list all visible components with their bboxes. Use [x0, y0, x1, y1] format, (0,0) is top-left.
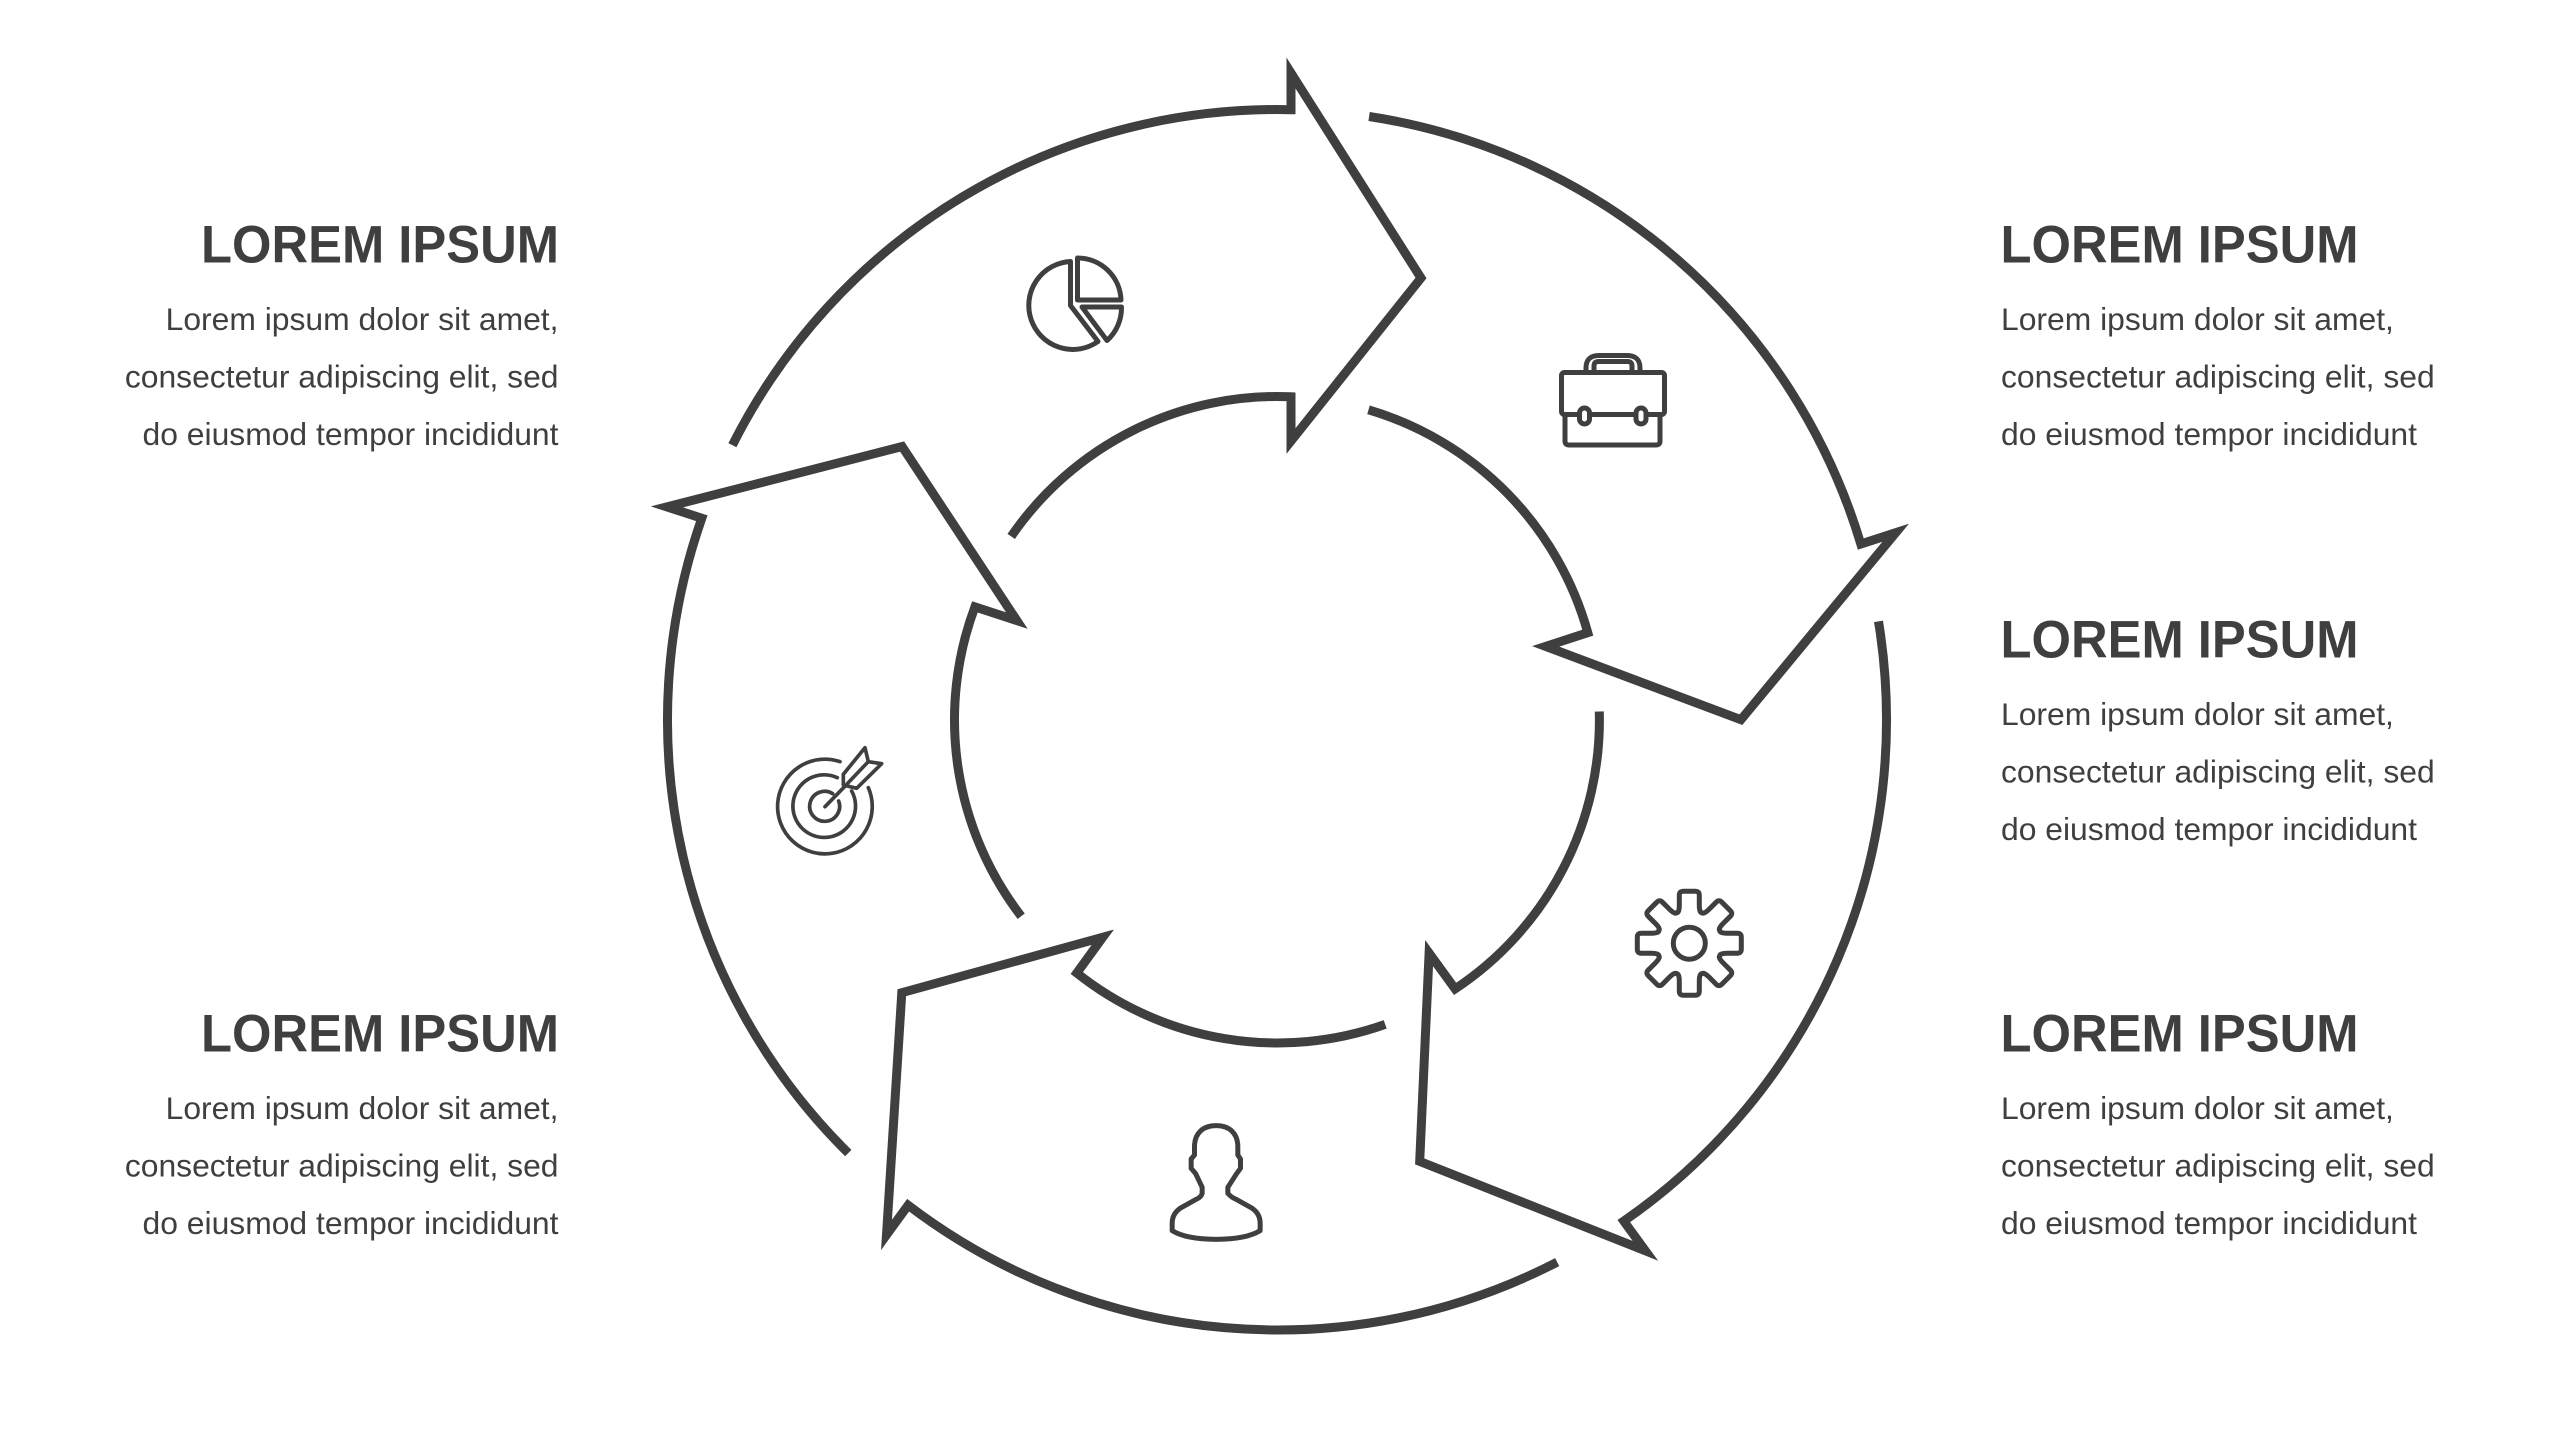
text block: bottom right — [2000, 1004, 2435, 1241]
text block: top right: Lorem ipsum dolor sit amet, — [2001, 301, 2394, 337]
text block: middle right: Lorem ipsum dolor sit amet, — [2001, 696, 2394, 732]
text block: middle right: LOREM IPSUM — [2000, 610, 2358, 670]
text block: bottom right: do eiusmod tempor incididunt — [2001, 1205, 2417, 1241]
arrow: lower right segment — [1420, 621, 1887, 1251]
text block: top left: consectetur adipiscing elit, sed — [125, 358, 558, 394]
arrow: top segment — [732, 73, 1421, 536]
text block: bottom right: LOREM IPSUM — [2000, 1004, 2358, 1064]
text block: top right — [2000, 216, 2435, 452]
text block: top left: do eiusmod tempor incididunt — [143, 416, 559, 452]
arrow: left segment — [667, 446, 1021, 1153]
text block: bottom left — [125, 1004, 559, 1241]
text block: top left: Lorem ipsum dolor sit amet, — [166, 301, 558, 337]
text block: bottom left: consectetur adipiscing elit, sed — [125, 1148, 558, 1184]
text block: bottom right: Lorem ipsum dolor sit amet, — [2001, 1090, 2394, 1126]
icon: gear — [1637, 891, 1741, 995]
text block: top right: consectetur adipiscing elit, sed — [2001, 358, 2435, 394]
text block: bottom right: consectetur adipiscing elit, sed — [2001, 1148, 2435, 1184]
arrow: lower left segment — [886, 937, 1557, 1330]
text block: top left — [125, 216, 559, 452]
icon: target with dart — [778, 748, 882, 854]
text block: middle right — [2000, 610, 2435, 847]
text block: bottom left: LOREM IPSUM — [201, 1004, 559, 1064]
text block: middle right: do eiusmod tempor incididunt — [2001, 811, 2417, 847]
text block: top right: LOREM IPSUM — [2000, 216, 2358, 274]
arrow: upper right segment — [1368, 116, 1896, 720]
text block: middle right: consectetur adipiscing elit, sed — [2001, 754, 2435, 790]
text block: top right: do eiusmod tempor incididunt — [2001, 416, 2417, 452]
text block: top left: LOREM IPSUM — [201, 216, 559, 274]
icon: pie chart — [1029, 258, 1122, 349]
text block: bottom left: do eiusmod tempor incididunt — [143, 1205, 559, 1241]
icon: briefcase — [1562, 356, 1664, 445]
icon: person — [1172, 1126, 1260, 1239]
text block: bottom left: Lorem ipsum dolor sit amet, — [166, 1090, 558, 1126]
